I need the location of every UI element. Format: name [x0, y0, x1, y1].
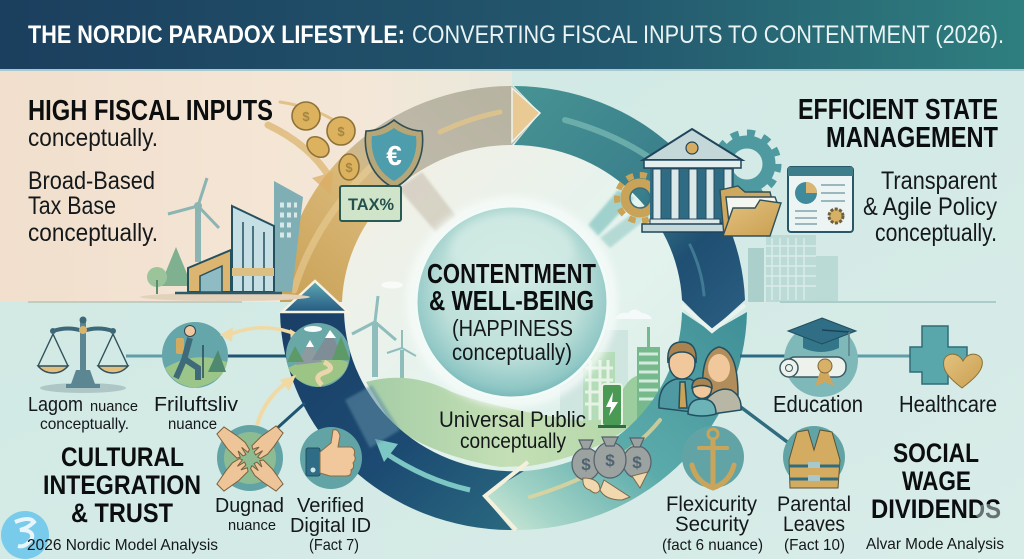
text: Flexicurity Security: (fact 6 nuance) — [662, 537, 763, 554]
arrow: flow inside navy band — [375, 439, 470, 490]
icon: healthcare cross and heart — [910, 326, 982, 388]
icon: graduation cap and diploma — [780, 318, 858, 397]
connector lines — [126, 356, 910, 444]
icon: tax note: TAX% — [348, 195, 394, 214]
text: Parental Leaves: Leaves — [783, 513, 845, 536]
panel heading: cultural integration and trust: CULTURAL — [61, 442, 184, 472]
footer source left: 2026 Nordic Model Analysis — [27, 537, 218, 554]
panel text: high fiscal inputs: Broad-Based — [28, 167, 155, 195]
icon: hiker (Friluftsliv) — [162, 322, 228, 388]
arrowhead: cream chevron — [485, 462, 528, 530]
icon: scales (Lagom) — [38, 316, 128, 393]
labels: education and healthcare: Education — [773, 391, 863, 417]
icon: family — [659, 342, 741, 416]
icon: dashboard window — [788, 167, 853, 232]
icon: euro shield — [365, 120, 423, 188]
text: Flexicurity Security: Security — [675, 513, 749, 536]
panel heading: cultural integration and trust: INTEGRATION — [43, 470, 201, 500]
main block — [232, 206, 274, 292]
text: Friluftsliv: nuance — [168, 416, 217, 433]
ring segment: inputs (gold to grey) — [280, 86, 540, 302]
panel heading: social wage dividends — [871, 438, 1001, 524]
title: THE NORDIC PARADOX LIFESTYLE: — [28, 21, 405, 49]
panel text: efficient state management — [798, 94, 998, 247]
sub text: (HAPPINESS — [452, 315, 573, 341]
icon: government building — [642, 129, 742, 232]
footer source right: Alvar Mode Analysis — [866, 536, 1004, 553]
panel text: high fiscal inputs: conceptually. — [28, 219, 158, 247]
text: Friluftsliv: Friluftsliv — [154, 394, 238, 416]
text: Parental Leaves: Parental — [777, 493, 851, 516]
text: Lagom: nuance — [90, 398, 138, 415]
panel text: high fiscal inputs: conceptually. — [28, 124, 158, 152]
icon: coins: $ — [345, 160, 353, 175]
text: Verified Digital ID: (Fact 7) — [309, 537, 359, 554]
ring: central cycle — [280, 86, 747, 530]
arrowhead: pale chevron at navy tip — [682, 305, 745, 331]
ring segment: social (teal) — [483, 312, 747, 530]
trees — [160, 247, 192, 286]
watermark smudge over heading — [974, 504, 1002, 520]
man — [659, 342, 704, 412]
icon: folder — [720, 186, 781, 236]
icon: money bags and broken eggshell: $ — [632, 453, 642, 472]
text: Dugnad — [215, 495, 284, 534]
panel heading: cultural integration and trust — [43, 442, 201, 528]
label: universal public: Universal Public — [439, 407, 586, 432]
text: Lagom: conceptually. — [40, 416, 129, 433]
panel heading: cultural integration and trust: & TRUST — [71, 498, 173, 528]
icon: watermark badge — [1, 511, 49, 559]
icon: money swoosh — [268, 102, 345, 195]
panel: high fiscal inputs background — [0, 70, 512, 302]
green hill behind charger — [612, 375, 660, 426]
labels: education and healthcare: Healthcare — [899, 391, 997, 417]
icon: faded office city — [748, 235, 838, 302]
icon: coins: $ — [337, 124, 345, 139]
panel heading: social wage dividends: WAGE — [902, 466, 971, 496]
back tower — [274, 181, 303, 292]
panel text: efficient state management: & Agile Policy — [863, 193, 997, 221]
turbine — [168, 178, 219, 262]
panel text: efficient state management: Transparent — [881, 167, 997, 195]
icon: anchor circle — [682, 426, 744, 488]
label: universal public — [439, 407, 586, 453]
child — [688, 378, 716, 416]
text: Verified Digital ID — [290, 495, 371, 554]
text: Dugnad: Dugnad — [215, 495, 284, 517]
stripes on ring — [294, 112, 704, 497]
text: Lagom: Lagom — [28, 394, 83, 416]
label: universal public: conceptually — [460, 430, 566, 453]
labels: education and healthcare — [773, 391, 997, 417]
text: Parental Leaves: (Fact 10) — [784, 537, 845, 554]
text: Lagom — [28, 394, 138, 433]
text: Verified Digital ID: Verified — [297, 495, 364, 517]
text: Friluftsliv — [154, 394, 238, 433]
panel text: high fiscal inputs: HIGH FISCAL INPUTS — [28, 95, 273, 127]
ray across navy band — [345, 385, 400, 448]
cloud left of centre — [381, 282, 403, 288]
ring segment: culture (navy) — [280, 312, 524, 530]
centre circle: contentment and well-being — [416, 206, 608, 398]
text: Flexicurity Security — [662, 493, 763, 554]
panel text: high fiscal inputs: Tax Base — [28, 192, 116, 220]
arrowhead: up into gold band — [282, 281, 348, 312]
scene: pale city behind centre — [560, 330, 628, 425]
icon: coins: $ — [302, 109, 310, 124]
woman — [703, 347, 741, 414]
icon: money bags and broken eggshell: $ — [581, 455, 591, 474]
text: Dugnad: nuance — [228, 517, 276, 534]
centre glow — [412, 202, 612, 402]
green landscape crescent — [366, 378, 650, 467]
lens highlight — [450, 214, 574, 286]
icon: hands circle (Dugnad) — [214, 424, 286, 494]
icon: money bags and broken eggshell: $ — [605, 451, 615, 470]
cloud right of centre — [614, 310, 652, 319]
text: Parental Leaves — [777, 493, 851, 554]
light rays from centre — [398, 172, 650, 248]
arrowhead: gold chevron — [512, 88, 540, 142]
icon: thumbs up (verified digital ID) — [300, 427, 362, 489]
green tower — [637, 327, 660, 419]
icon: building, turbine and trees — [140, 178, 310, 301]
panel text: efficient state management: conceptually. — [875, 219, 997, 247]
heading: CONTENTMENT — [427, 258, 596, 289]
icon: life vest circle — [783, 426, 845, 488]
charging station — [598, 384, 626, 428]
panel text: high fiscal inputs — [28, 95, 273, 247]
panel divider lines — [28, 301, 996, 303]
panel heading: social wage dividends: SOCIAL — [893, 438, 979, 468]
scene: green tower and charging station — [598, 327, 660, 428]
header bar — [0, 0, 1024, 71]
arrow: Friluftsliv to mountains — [220, 327, 303, 343]
ring interior disk — [340, 143, 684, 473]
icon: gold gear — [617, 175, 663, 221]
centre circle: contentment and well-being: conceptually) — [452, 339, 572, 365]
text: Verified Digital ID: Digital ID — [290, 515, 371, 537]
scene: wind turbines behind centre — [352, 296, 416, 378]
icon: tax note — [340, 186, 401, 221]
lower wing — [188, 250, 231, 292]
text: Flexicurity Security: Flexicurity — [666, 493, 757, 516]
icon: money bags and broken eggshell — [572, 437, 651, 500]
ring segment: state (teal to navy) — [514, 86, 745, 330]
centre circle: contentment and well-being: & WELL-BEING — [429, 285, 594, 316]
icon: euro shield: € — [386, 140, 402, 171]
panel heading: social wage dividends: DIVIDENDS — [871, 494, 1001, 524]
arrow: Dugnad to mountains — [257, 375, 296, 425]
icon: teal gear — [716, 133, 778, 195]
icon: coins — [292, 102, 359, 180]
icon: mountains circle — [286, 323, 350, 387]
